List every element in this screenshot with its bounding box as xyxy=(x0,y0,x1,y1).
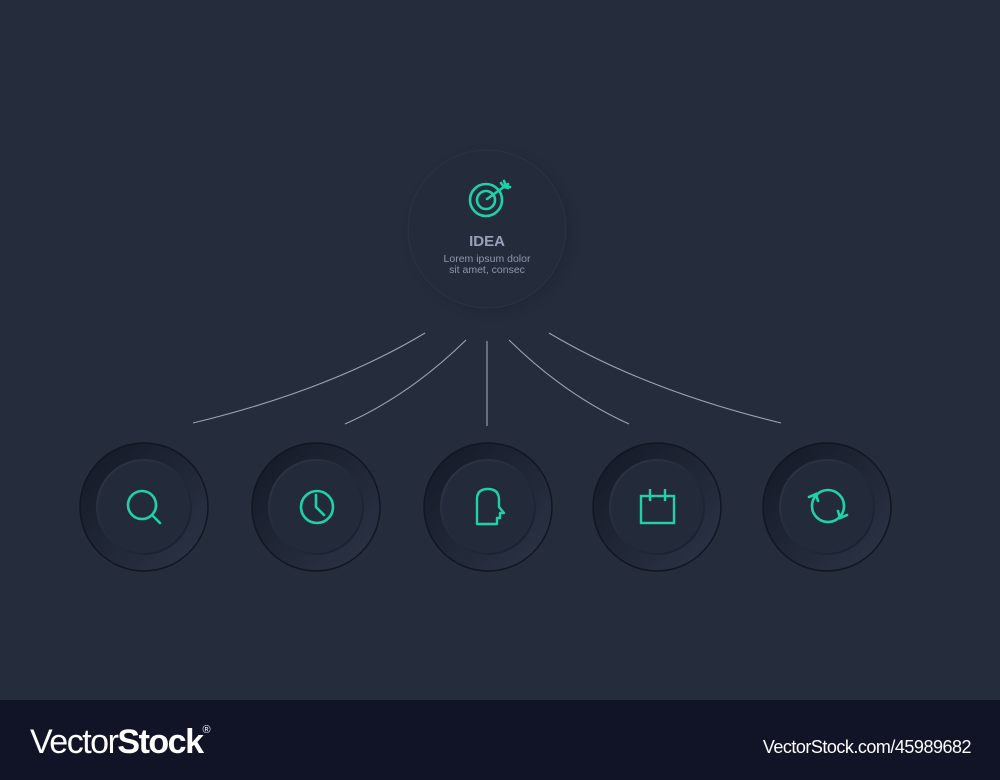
footer logo: VectorStock xyxy=(30,723,202,761)
text block: Lorem ipsum dolor xyxy=(444,253,531,265)
central node: idea xyxy=(396,137,588,329)
node: head xyxy=(424,443,552,571)
node: calendar xyxy=(593,443,721,571)
central node: idea: sit amet, consec xyxy=(449,264,525,276)
node: clock xyxy=(252,443,380,571)
icon: clock xyxy=(301,491,333,523)
connector lines xyxy=(193,333,781,426)
icon: target xyxy=(470,181,510,216)
icon: refresh xyxy=(809,490,847,522)
node: refresh xyxy=(763,443,891,571)
node: search xyxy=(80,443,208,571)
icon: calendar xyxy=(641,489,674,523)
icon: head xyxy=(477,489,504,524)
footer bar xyxy=(0,700,1000,780)
heading: IDEA: IDEA xyxy=(469,233,505,250)
footer url: VectorStock.com/45989682 xyxy=(763,737,971,757)
footer logo: ® xyxy=(202,724,210,736)
icon: magnifier xyxy=(128,491,160,523)
